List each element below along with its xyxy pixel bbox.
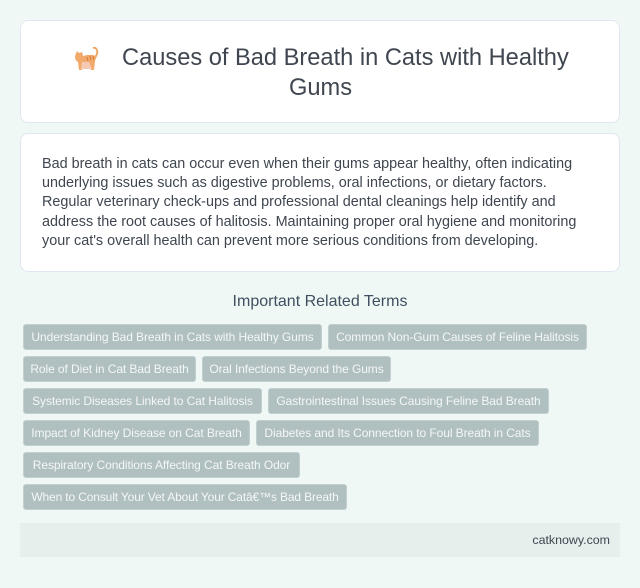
tag: Systemic Diseases Linked to Cat Halitosis [32, 394, 253, 408]
tag [23, 420, 250, 446]
tag [328, 324, 587, 350]
panel: title card [20, 20, 620, 123]
tag: Impact of Kidney Disease on Cat Breath [31, 426, 242, 440]
text block: description: your cat's overall health can prevent more serious conditions from developing. [42, 233, 538, 249]
tag: Understanding Bad Breath in Cats with Healthy Gums [31, 330, 314, 344]
tag [23, 324, 322, 350]
text block: description: underlying issues such as digestive problems, oral infections, or dietary factors. [42, 175, 547, 191]
tag: Gastrointestinal Issues Causing Feline Bad Breath [276, 394, 541, 408]
tag [202, 356, 391, 382]
tag [268, 388, 549, 414]
tag [23, 484, 347, 510]
tag [23, 356, 196, 382]
footer text: catknowy.com [532, 533, 610, 547]
tag: Respiratory Conditions Affecting Cat Breath Odor [33, 458, 290, 472]
text block: description: Bad breath in cats can occur even when their gums appear healthy, often indicating [42, 156, 572, 172]
tag list [23, 324, 587, 510]
tag: Diabetes and Its Connection to Foul Breath in Cats [264, 426, 531, 440]
tag [23, 388, 262, 414]
tag [23, 452, 300, 478]
tag: When to Consult Your Vet About Your Catâ€™s Bad Breath [31, 490, 339, 504]
tag [256, 420, 539, 446]
text block: description: Regular veterinary check-ups and professional dental cleanings help identify and [42, 194, 556, 210]
tag: Role of Diet in Cat Bad Breath [30, 362, 189, 376]
heading: related terms: Important Related Terms [233, 293, 407, 310]
text block: description: address the root causes of halitosis. Maintaining proper oral hygiene and monitoring [42, 214, 576, 230]
icon: cat [75, 47, 98, 70]
title: Causes of Bad Breath in Cats with Healthy [122, 45, 569, 71]
tag: Oral Infections Beyond the Gums [209, 362, 384, 376]
panel: description [20, 133, 620, 272]
footer bar [20, 523, 620, 557]
tag: Common Non-Gum Causes of Feline Halitosis [336, 330, 579, 344]
title: Gums [289, 75, 352, 101]
title [122, 45, 569, 101]
